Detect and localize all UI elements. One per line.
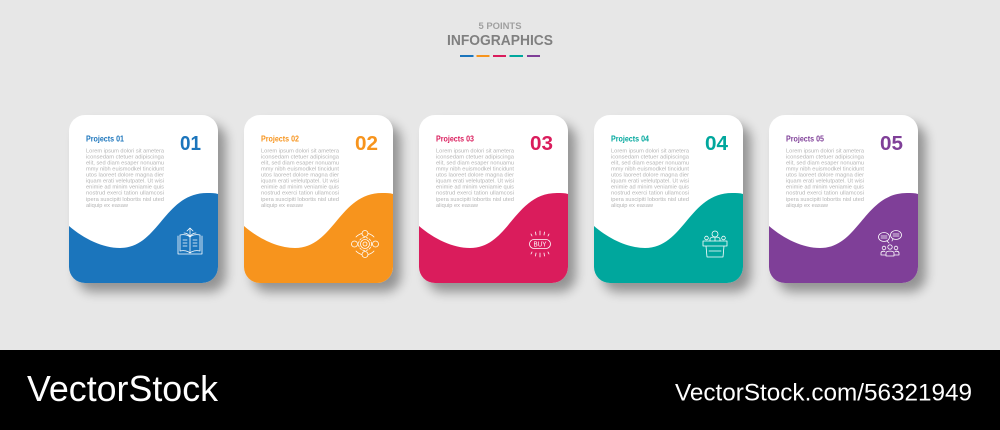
label: Projects 05 — [786, 134, 824, 144]
icon: gear with orbit checks — [352, 230, 378, 258]
body text: elit, sed diam esaper nonuamu — [611, 160, 689, 166]
body text: iconsedam ctetuer adipiscinga — [86, 154, 165, 160]
panel: project 01 — [69, 115, 226, 292]
body text — [786, 148, 865, 209]
body text: iquam erati velelutpatel. Ut wisi — [611, 179, 689, 185]
body text: Lorem ipsum dolori sit ametera — [611, 148, 690, 154]
body text: enimie ad minim veniamie quis — [436, 185, 514, 191]
panel: project 03 — [419, 115, 576, 292]
body text: iconsedam ctetuer adipiscinga — [611, 154, 690, 160]
number: 03 — [530, 132, 553, 155]
body text: utos laoreet dolore magna dier — [436, 173, 514, 179]
body text: elit, sed diam esaper nonuamu — [436, 160, 514, 166]
body text: mmy nibh euismodkel tincidunt — [261, 166, 339, 172]
icon: book with plant — [178, 228, 202, 254]
icon: buy badge: BUY — [534, 242, 547, 248]
body text: Lorem ipsum dolori sit ametera — [786, 148, 865, 154]
icon: speaker at podium — [703, 231, 727, 257]
body text: enimie ad minim veniamie quis — [611, 185, 689, 191]
colour dashes — [460, 55, 540, 57]
body text: mmy nibh euismodkel tincidunt — [436, 166, 514, 172]
body text: ipera suscipiti lobortis nisl uted — [261, 197, 339, 203]
body text: aliquip ex easaw — [261, 203, 304, 209]
body text: mmy nibh euismodkel tincidunt — [611, 166, 689, 172]
body text: iquam erati velelutpatel. Ut wisi — [86, 179, 164, 185]
label: Projects 02 — [261, 134, 299, 144]
body text: aliquip ex easaw — [611, 203, 654, 209]
body text: ipera suscipiti lobortis nisl uted — [436, 197, 514, 203]
wave — [244, 193, 393, 283]
body text: enimie ad minim veniamie quis — [86, 185, 164, 191]
body text: ipera suscipiti lobortis nisl uted — [786, 197, 864, 203]
body text: iconsedam ctetuer adipiscinga — [261, 154, 340, 160]
body text: nostrud exerci tation ullamcosi — [786, 191, 864, 197]
body text: utos laoreet dolore magna dier — [611, 173, 689, 179]
body text: aliquip ex easaw — [436, 203, 479, 209]
panel: project 04 — [594, 115, 751, 292]
body text — [611, 148, 690, 209]
number: 01 — [180, 132, 201, 155]
body text: mmy nibh euismodkel tincidunt — [786, 166, 864, 172]
label: Projects 04 — [611, 134, 649, 144]
wave — [769, 193, 918, 283]
body text: enimie ad minim veniamie quis — [786, 185, 864, 191]
icon: group with speech bubbles — [878, 230, 902, 256]
body text: iquam erati velelutpatel. Ut wisi — [436, 179, 514, 185]
panel: project 05 — [769, 115, 926, 292]
number: 04 — [705, 132, 729, 155]
body text: elit, sed diam esaper nonuamu — [261, 160, 339, 166]
body text: elit, sed diam esaper nonuamu — [86, 160, 164, 166]
body text: mmy nibh euismodkel tincidunt — [86, 166, 164, 172]
body text: utos laoreet dolore magna dier — [261, 173, 339, 179]
body text: iquam erati velelutpatel. Ut wisi — [786, 179, 864, 185]
body text: ipera suscipiti lobortis nisl uted — [86, 197, 164, 203]
body text: utos laoreet dolore magna dier — [786, 173, 864, 179]
body text: iconsedam ctetuer adipiscinga — [786, 154, 865, 160]
brand logo text: VectorStock — [27, 368, 219, 409]
body text: aliquip ex easaw — [86, 203, 129, 209]
title block — [447, 21, 553, 57]
subtitle: 5 POINTS — [478, 21, 522, 32]
body text: nostrud exerci tation ullamcosi — [261, 191, 339, 197]
body text: nostrud exerci tation ullamcosi — [436, 191, 514, 197]
body text: Lorem ipsum dolori sit ametera — [436, 148, 515, 154]
body text: elit, sed diam esaper nonuamu — [786, 160, 864, 166]
body text: Lorem ipsum dolori sit ametera — [261, 148, 340, 154]
body text: ipera suscipiti lobortis nisl uted — [611, 197, 689, 203]
icon: buy badge — [530, 231, 550, 257]
body text: iconsedam ctetuer adipiscinga — [436, 154, 515, 160]
panel: project 02 — [244, 115, 401, 292]
body text — [436, 148, 515, 209]
heading: INFOGRAPHICS — [447, 33, 553, 49]
number: 05 — [880, 132, 903, 155]
image url text: VectorStock.com/56321949 — [675, 380, 972, 406]
body text: enimie ad minim veniamie quis — [261, 185, 339, 191]
number: 02 — [355, 132, 378, 155]
body text: nostrud exerci tation ullamcosi — [86, 191, 164, 197]
label: Projects 03 — [436, 134, 474, 144]
body text — [261, 148, 340, 209]
body text — [86, 148, 165, 209]
body text: aliquip ex easaw — [786, 203, 829, 209]
body text: nostrud exerci tation ullamcosi — [611, 191, 689, 197]
body text: utos laoreet dolore magna dier — [86, 173, 164, 179]
body text: Lorem ipsum dolori sit ametera — [86, 148, 165, 154]
wave — [69, 193, 218, 283]
wave — [594, 193, 743, 283]
body text: iquam erati velelutpatel. Ut wisi — [261, 179, 339, 185]
footer bar — [0, 350, 1000, 430]
wave — [419, 193, 568, 283]
label: Projects 01 — [86, 134, 124, 144]
